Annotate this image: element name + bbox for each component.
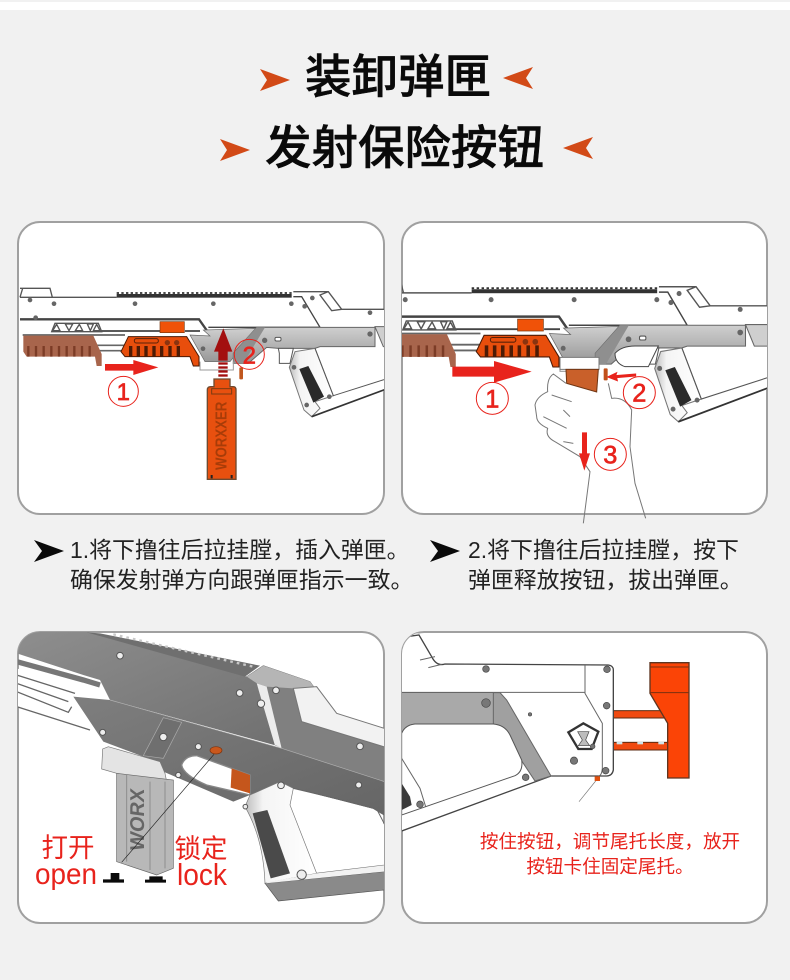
icon: open position [103,873,124,883]
label: open: 打开 [42,833,94,863]
magazine in hand [566,369,598,392]
step marker 2 [234,339,264,369]
step marker 2: 2 [632,380,646,408]
screws [100,652,363,879]
lower receiver [73,696,384,816]
magazine well [102,747,167,782]
icon: left title arrow [260,69,290,91]
rail [87,632,260,677]
stock rods [612,711,668,750]
icon: left title arrow [220,139,250,161]
label: open: open [35,858,97,891]
leader line [122,754,214,862]
hand outline [535,374,646,523]
label: open [35,833,97,891]
magazine well [560,357,599,369]
text block: 2.将下撸往后拉挂膛，按下 [468,537,739,563]
panel: safety button [13,632,400,923]
label: lock: 锁定 [174,834,228,864]
transparent magazine [117,773,173,875]
step marker 2 [623,377,655,409]
trigger guard opening [182,756,250,795]
stock opening [310,792,384,865]
text block: 确保发射弹方向跟弹匣指示一致。 [70,567,413,593]
rear receiver grey [246,665,384,781]
trigger guard opening [615,346,658,367]
gun side view [402,284,767,423]
label: lock [174,834,228,892]
adjustment button [595,776,600,781]
panel: remove magazine [401,221,768,524]
icon: right title arrow [563,137,593,159]
rear receiver [402,633,613,832]
step marker 1 [476,382,508,414]
icon: right title arrow [503,67,533,89]
grip [245,782,317,883]
step marker 1: 1 [485,385,499,413]
instruction 1 [34,537,413,593]
gun perspective view [13,632,400,901]
heading: 发射保险按钮: 发射保险按钮 [265,122,544,174]
arrow: slide rearward [105,360,158,375]
top white strip [0,2,790,10]
title: line 1 [260,51,533,103]
step marker 1: 1 [117,379,130,406]
icon: black pointer [430,540,460,562]
stock opening [402,724,522,815]
logo emblem [568,723,598,749]
heading: 装卸弹匣: 装卸弹匣 [305,51,491,103]
label: lock: lock [177,857,227,892]
step marker 2: 2 [243,342,256,369]
release latch [239,367,243,379]
screws [417,666,610,808]
text block: 弹匣释放按钮，拔出弹匣。 [468,567,743,593]
step marker 3: 3 [603,441,617,469]
magazine [207,379,236,479]
release button [604,368,608,380]
leader line [579,781,596,802]
arrow: slide rearward [452,361,532,383]
grey receiver band [402,693,493,733]
step marker 1 [108,376,138,406]
insert arrow [214,328,232,377]
caption: 按住按钮，调节尾托长度，放开 [480,831,740,852]
gun perspective view: WORX [127,787,149,852]
arrow: press release button [608,373,636,381]
icon: lock position [145,876,166,883]
step marker 3 [594,438,626,470]
safety button [210,747,222,754]
title: line 2 [220,122,593,174]
icon: black pointer [34,540,64,562]
upper receiver [13,632,280,747]
text block: 1.将下撸往后拉挂膛，插入弹匣。 [70,537,410,563]
arrow: pull magazine [579,432,590,471]
panel: stock adjustment [402,632,767,923]
instruction 2 [430,537,743,593]
stock butt plate [650,663,689,778]
gun side view [19,288,384,418]
barrel stripes [18,668,19,707]
panel: insert magazine [17,221,385,515]
magazine: WORXXER [214,402,231,470]
caption: 按钮卡住固定尾托。 [526,856,694,877]
